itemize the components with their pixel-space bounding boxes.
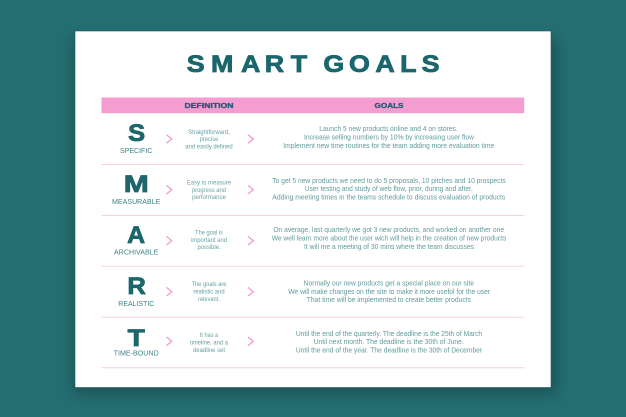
header: definition: DEFINITION (184, 103, 234, 110)
row: specific (120, 120, 494, 155)
letter A: A (127, 222, 145, 249)
goals text (272, 225, 507, 251)
goals text (272, 176, 506, 202)
label measurable: MEASURABLE (112, 199, 161, 206)
goals text: To get 5 new products we need to do 5 proposals, 10 pitches and 10 prospects (272, 176, 506, 185)
header bar (102, 98, 524, 113)
arrow (166, 337, 172, 346)
arrow (166, 135, 172, 143)
row: archivable (114, 222, 507, 256)
definition text: precise (200, 136, 219, 143)
goals text: Implement new time routines for the team adding more evaluation time (283, 141, 494, 150)
goals text: On average, last quarterly we got 3 new products, and worked on another one (273, 225, 504, 234)
letter S: S (128, 120, 145, 147)
label specific: SPECIFIC (120, 148, 152, 155)
definition text: performance (192, 194, 226, 201)
definition text: relevant. (198, 296, 220, 303)
definition text: deadline set (193, 347, 225, 354)
row: realistic (118, 273, 491, 308)
arrow (248, 236, 253, 245)
arrow (166, 287, 172, 296)
letter R: R (127, 273, 146, 300)
definition text (192, 281, 227, 303)
definition text: The goal is (195, 230, 223, 236)
definition text (190, 332, 228, 354)
definition text: It has a (200, 332, 219, 339)
goals text (283, 124, 494, 150)
goals text: Increase selling numbers by 10% by increasing user flow (304, 132, 475, 142)
definition text (191, 230, 227, 251)
arrow (248, 135, 253, 143)
goals text: It will me a meeting of 30 mins where the team discusses (304, 242, 474, 251)
arrow (248, 185, 253, 194)
card shadow (72, 38, 558, 395)
goals text: Adding meeting times in the teams schedule to discuss evaluation of products (272, 192, 506, 202)
definition text: timeline, and a (190, 340, 228, 346)
definition text: Easy to measure (187, 180, 231, 186)
goals text: We well learn more about the user wich will help in the creation of new products (272, 234, 507, 242)
definition text: possible. (197, 244, 221, 251)
definition text: important and (191, 237, 227, 244)
label realistic: REALISTIC (118, 301, 154, 308)
arrow (248, 337, 253, 346)
letter T: T (128, 325, 145, 352)
header: goals: GOALS (374, 103, 404, 110)
letter M: M (124, 171, 149, 198)
arrow (166, 236, 172, 245)
definition text (185, 129, 233, 150)
goals text: We will make changes on the site to make it more usefol for the user (288, 287, 491, 296)
row: measurable (112, 171, 506, 206)
arrow (248, 287, 253, 296)
goals text: Normally our new products get a special place on our site (304, 278, 474, 288)
goals text: Until the end of the year. The deadline is the 30th of December (296, 346, 483, 354)
definition text: Straightforward, (188, 129, 230, 136)
definition text (187, 180, 231, 201)
goals text: Launch 5 new products online and 4 on stores. (319, 124, 458, 133)
goals text: Until next month. The deadline is the 30th of June. (314, 337, 464, 346)
title: SMART GOALS (187, 51, 440, 78)
white card (75, 31, 551, 388)
row: time-bound (114, 325, 483, 358)
goals text (288, 278, 491, 304)
goals text: Until the end of the quarterly. The deadline is the 25th of March (296, 329, 482, 338)
label time-bound: TIME-BOUND (114, 350, 159, 358)
goals text: That time will be implemented to create better products (307, 295, 471, 304)
label archivable: ARCHIVABLE (114, 250, 159, 256)
definition text: and easily defined (185, 144, 233, 150)
definition text: progress and (192, 187, 226, 194)
definition text: The goals are (192, 281, 227, 288)
definition text: realistic and (193, 288, 225, 296)
arrow (166, 185, 172, 194)
goals text: User testing and study of web flow, prior, during and after. (305, 184, 473, 193)
goals text (296, 329, 483, 354)
